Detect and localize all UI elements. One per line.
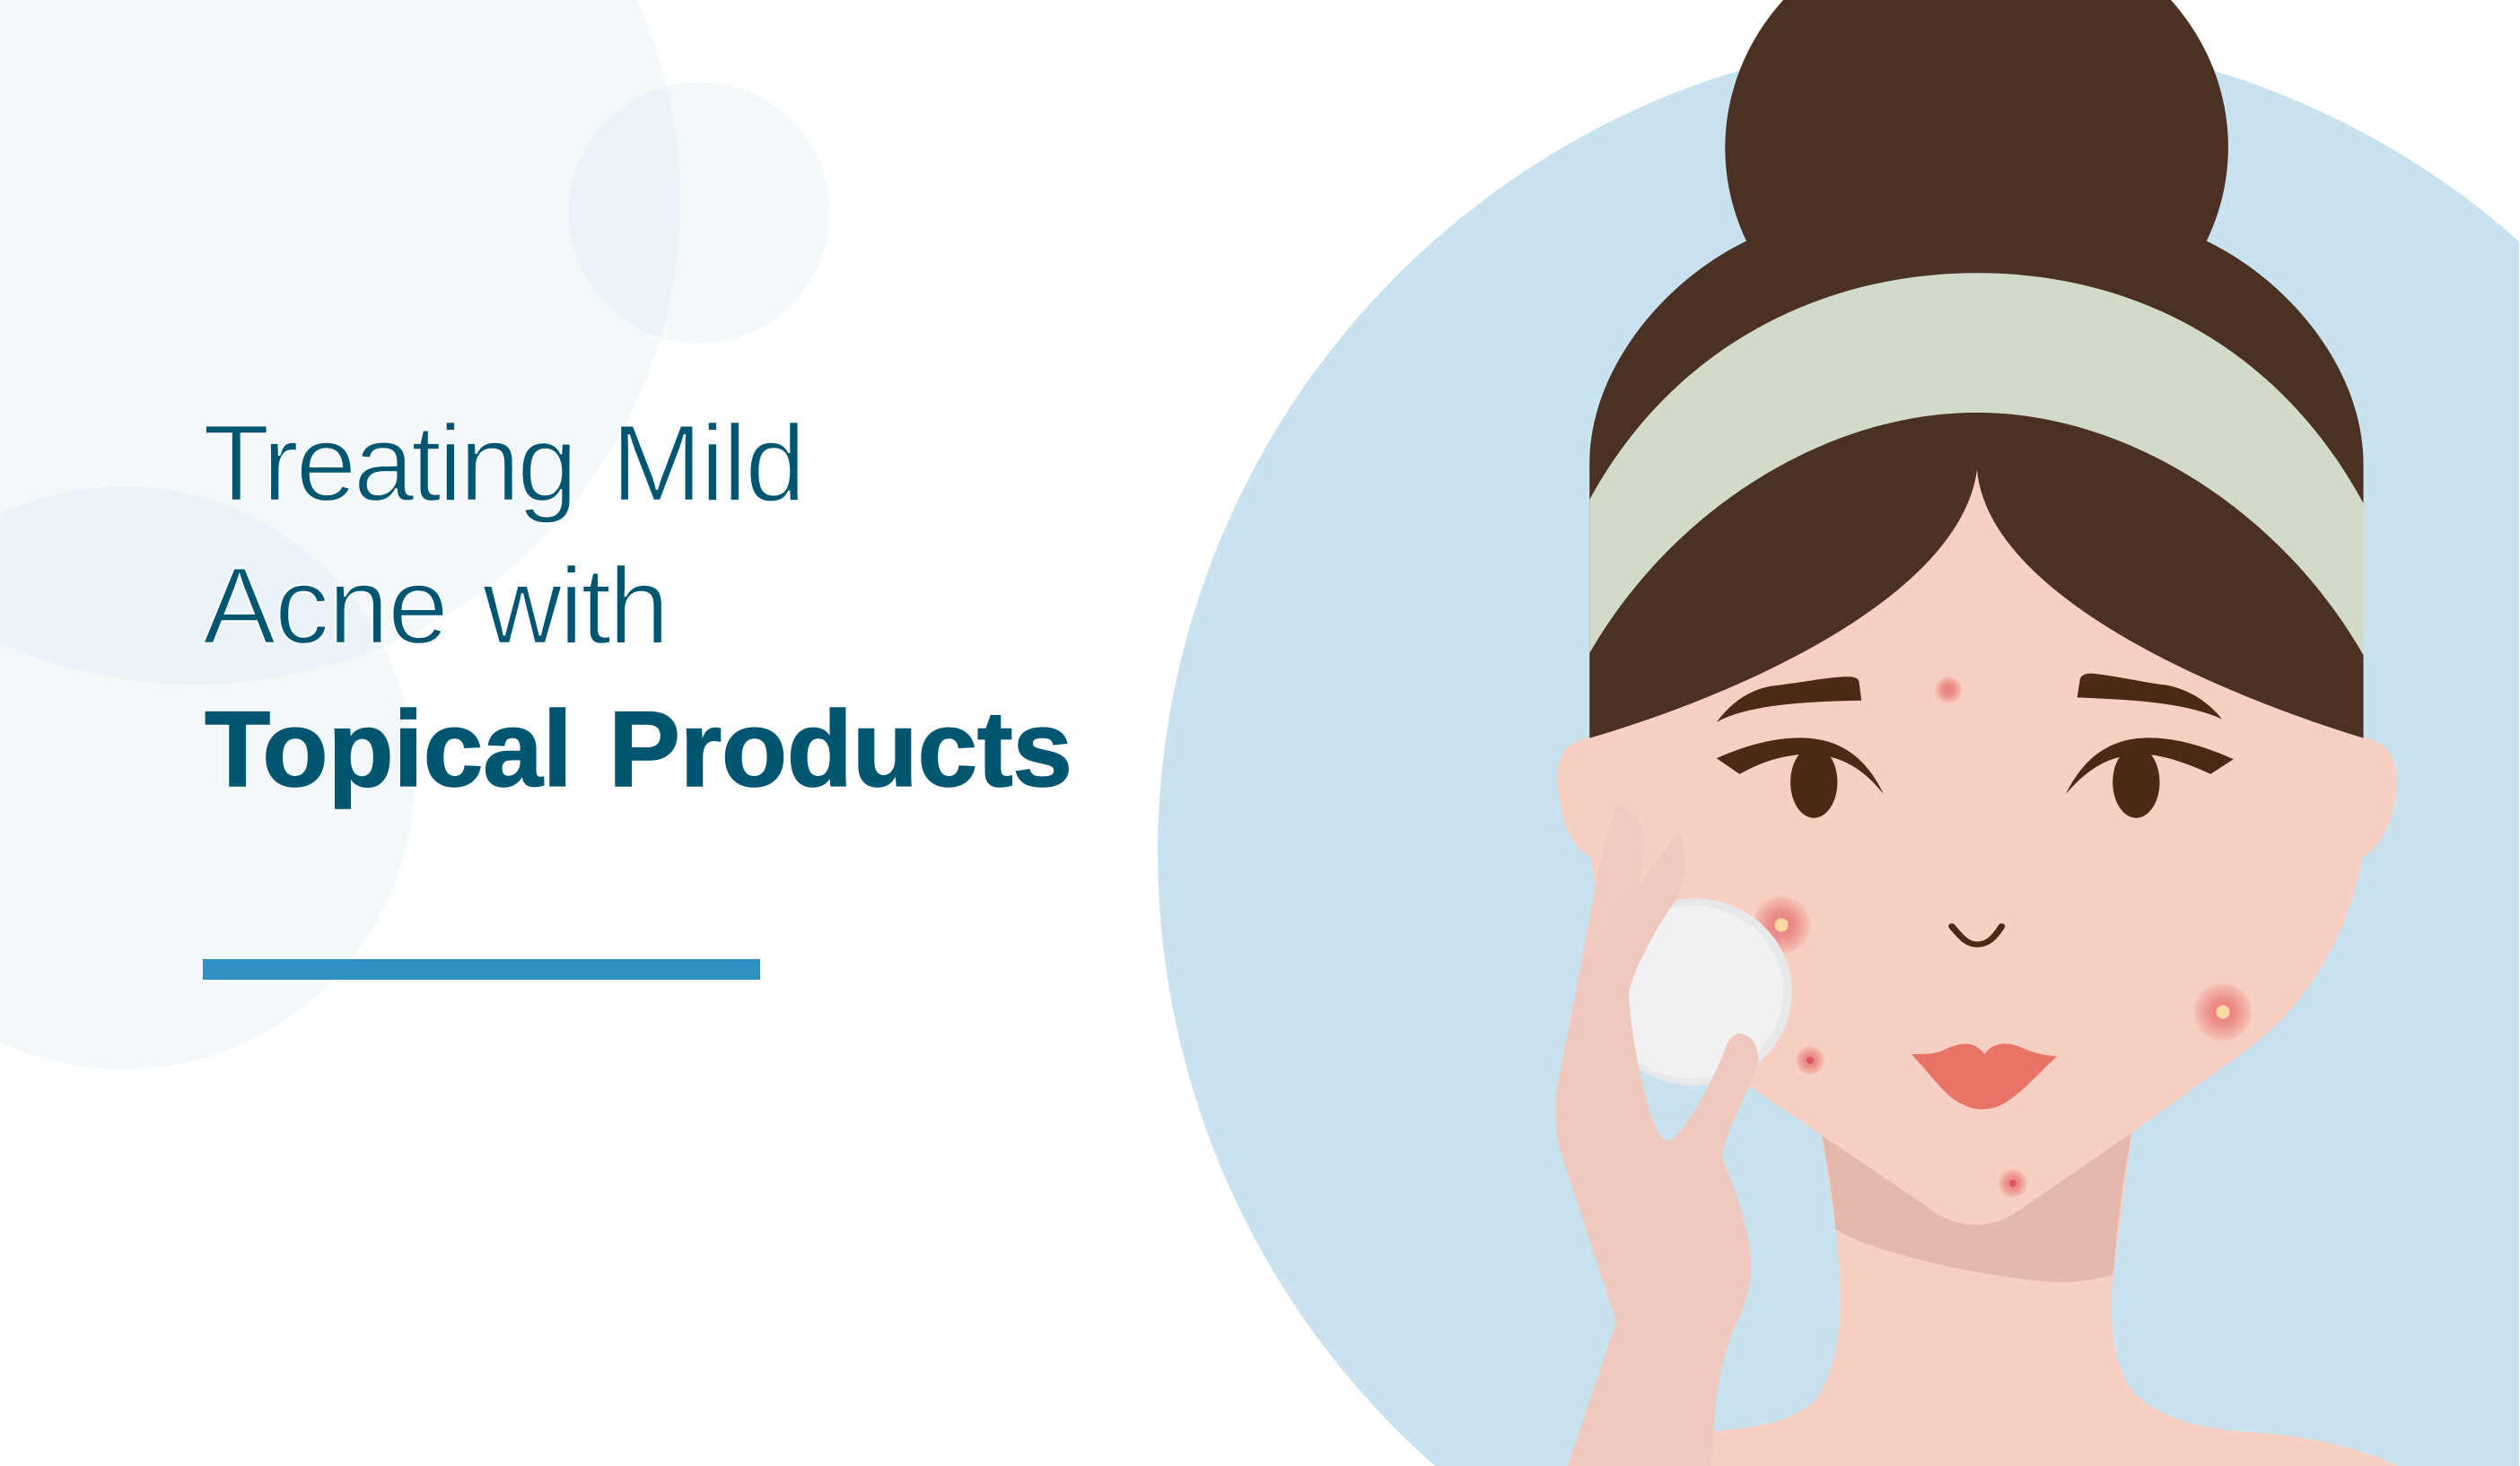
title line 2: Acne: [203, 545, 449, 667]
pimple: chin: [1999, 1169, 2027, 1198]
right eye: [2066, 737, 2234, 818]
title line 3 bold: Products: [608, 689, 1072, 809]
back finger: [1579, 803, 1645, 975]
right eyebrow: [2078, 674, 2222, 719]
title line 2: with: [482, 545, 669, 667]
hand holding pad: [1555, 803, 1758, 1466]
headband: [1589, 273, 2364, 655]
neck and shoulders: [1711, 1133, 2398, 1466]
title line 1: [203, 402, 806, 524]
hair and bun: [1589, 0, 2364, 738]
title line 3 bold: Topical: [205, 689, 573, 809]
accent bar: [203, 959, 760, 980]
face and ears: [1557, 450, 2397, 1225]
left eye: [1717, 737, 1884, 818]
background circle: lower-left: [0, 486, 415, 1069]
neck shadow: [1822, 1052, 2131, 1282]
background circle: large top-left: [0, 0, 680, 685]
pimple: lower left cheek: [1796, 1046, 1824, 1075]
background circle: small top: [569, 83, 829, 343]
title line 1: Mild: [611, 402, 806, 524]
nose: [1952, 926, 2001, 945]
title line 3 bold: [205, 689, 1072, 809]
portrait illustration: [1555, 0, 2398, 1466]
title line 1: Treating: [203, 402, 578, 524]
left eyebrow: [1717, 676, 1861, 722]
pimple: right cheek: [2194, 983, 2252, 1041]
title: [203, 402, 1072, 809]
palm, second finger and thumb: [1555, 833, 1758, 1466]
cotton pad: [1597, 898, 1792, 1086]
large blue circle behind portrait: [1158, 35, 2519, 1466]
title line 2: [203, 545, 669, 667]
pimple: left cheek: [1753, 896, 1810, 954]
pimple: forehead: [1935, 676, 1962, 703]
lips: [1912, 1043, 2057, 1109]
